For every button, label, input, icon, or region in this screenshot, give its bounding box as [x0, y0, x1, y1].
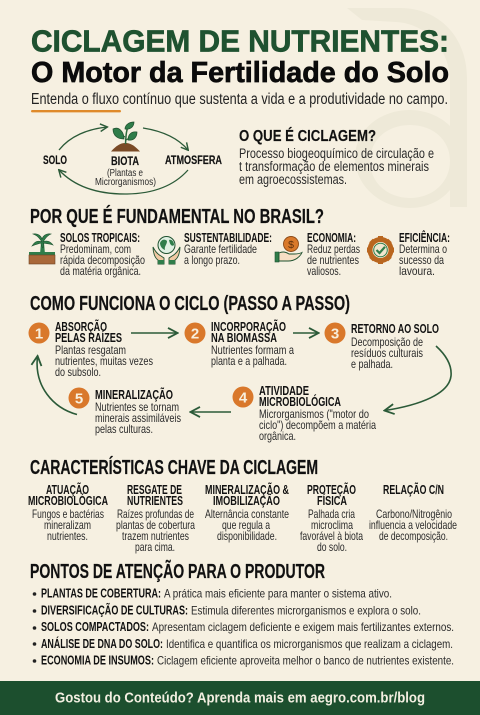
- attention list: A prática mais eficiente para manter o sistema ativo.: [164, 586, 392, 600]
- item: economia: de nutrientes: [307, 253, 359, 267]
- step 3: resíduos culturais: [351, 346, 423, 360]
- icon: sprout: [111, 122, 140, 152]
- heading: how it works: COMO FUNCIONA O CICLO (PASSO A PASSO): [30, 293, 350, 315]
- step 1: PELAS RAÍZES: [55, 330, 122, 345]
- item: economia: Reduz perdas: [307, 242, 360, 256]
- what is cycling: Processo biogeoquímico de circulação e: [239, 146, 434, 161]
- characteristic: mineralizacao: disponibilidade.: [217, 529, 277, 543]
- item: solos tropicais: [29, 231, 145, 278]
- heading: key characteristics: CARACTERÍSTICAS CHAVE DA CICLAGEM: [30, 456, 318, 479]
- characteristic: relacao: de decomposição.: [379, 529, 448, 543]
- what is cycling: em agroecossistemas.: [239, 172, 347, 187]
- step 1: do subsolo.: [55, 365, 101, 379]
- characteristic: protecao: FÍSICA: [317, 493, 347, 508]
- what is cycling: [239, 126, 434, 187]
- characteristic: protecao: do solo.: [317, 540, 347, 554]
- characteristic: resgate: para cima.: [135, 540, 175, 554]
- step 1: ABSORÇÃO: [55, 319, 107, 334]
- step 5: 5: [75, 390, 83, 408]
- attention list: ECONOMIA DE INSUMOS:: [41, 654, 154, 668]
- characteristic: resgate: trazem nutrientes: [122, 529, 189, 543]
- step 3: e palhada.: [351, 357, 393, 371]
- characteristic: mineralizacao: Alternância constante: [205, 507, 289, 521]
- characteristic: mineralizacao: MINERALIZAÇÃO &: [205, 482, 289, 497]
- characteristic: protecao: microclima: [311, 518, 353, 532]
- item: solos tropicais: SOLOS TROPICAIS:: [60, 231, 140, 245]
- characteristic: atuacao: ATUAÇÃO: [46, 482, 89, 497]
- watermark logo: [347, 8, 467, 208]
- item: eficiencia: sucesso da: [399, 253, 444, 267]
- characteristic: protecao: [300, 482, 363, 554]
- heading: why: POR QUE É FUNDAMENTAL NO BRASIL?: [30, 205, 324, 228]
- step 3: 3: [331, 326, 339, 342]
- title: O Motor da Fertilidade do Solo: [31, 57, 449, 89]
- characteristic: atuacao: nutrientes.: [47, 529, 88, 543]
- characteristic: relacao: Carbono/Nitrogênio: [376, 507, 452, 521]
- characteristic: resgate: [116, 483, 195, 554]
- arrow: step 5 to 1: [37, 356, 77, 414]
- arrow: step 4 to 5: [191, 411, 231, 413]
- step 1: 1: [35, 326, 43, 342]
- step 2: INCORPORAÇÃO: [211, 319, 286, 334]
- item: sustentabilidade: SUSTENTABILIDADE:: [184, 231, 272, 245]
- step 2: planta e a palhada.: [211, 354, 287, 368]
- step 4: ciclo") decompõem a matéria: [259, 418, 376, 432]
- what is cycling: O QUE É CICLAGEM?: [239, 126, 376, 145]
- characteristic: mineralizacao: [205, 482, 289, 543]
- item: solos tropicais: da matéria orgânica.: [60, 264, 141, 278]
- cycle diagram: BIOTA: [111, 154, 139, 168]
- step 2: 2: [191, 326, 199, 342]
- cycle diagram: (Plantas e: [107, 168, 143, 179]
- icon: gear with check: [367, 236, 394, 264]
- title: CICLAGEM DE NUTRIENTES:: [31, 24, 449, 58]
- item: solos tropicais: rápida decomposição: [60, 253, 145, 267]
- item: eficiencia: Determina o: [399, 242, 447, 256]
- arrow: step 1 to 2: [131, 332, 177, 334]
- step 4: orgânica.: [259, 429, 296, 443]
- item: eficiencia: lavoura.: [399, 264, 435, 278]
- step 5: Nutrientes se tornam: [95, 400, 179, 414]
- title: [31, 24, 449, 89]
- icon: globe in hands: [153, 236, 180, 264]
- attention list: DIVERSIFICAÇÃO DE CULTURAS:: [41, 602, 188, 618]
- cycle diagram: ATMOSFERA: [165, 153, 222, 167]
- step 4: MICROBIOLÓGICA: [259, 394, 341, 409]
- characteristic: resgate: plantas de cobertura: [116, 518, 195, 532]
- characteristic: protecao: PROTEÇÃO: [307, 482, 356, 497]
- step 1: nutrientes, muitas vezes: [55, 354, 153, 368]
- item: sustentabilidade: Garante fertilidade: [184, 242, 257, 256]
- step 4: 4: [239, 390, 248, 406]
- item: economia: [275, 231, 360, 278]
- attention list: Estimula diferentes microrganismos e explora o solo.: [191, 604, 421, 618]
- step 3: RETORNO AO SOLO: [351, 322, 439, 336]
- characteristic: atuacao: [28, 482, 108, 543]
- characteristic: resgate: Raízes profundas de: [117, 507, 194, 521]
- item: sustentabilidade: a longo prazo.: [184, 253, 240, 267]
- step 1: [28, 319, 153, 379]
- attention list: [33, 586, 454, 668]
- heading: attention points: PONTOS DE ATENÇÃO PARA O PRODUTOR: [30, 560, 325, 583]
- item: economia: ECONOMIA:: [307, 231, 356, 245]
- step 5: minerais assimiláveis: [95, 411, 181, 425]
- step 1: Plantas resgatam: [55, 343, 126, 357]
- step 4: [232, 384, 376, 443]
- step 4: ATIVIDADE: [259, 384, 309, 398]
- characteristic: atuacao: MICROBIOLÓGICA: [28, 493, 108, 508]
- attention list: ANÁLISE DE DNA DO SOLO:: [41, 636, 163, 651]
- item: solos tropicais: Predominam, com: [60, 242, 131, 256]
- characteristic: mineralizacao: que regula a: [222, 518, 270, 532]
- cycle diagram: Microrganismos): [95, 177, 156, 188]
- characteristic: relacao: [369, 482, 457, 543]
- step 3: Decomposição de: [351, 335, 423, 349]
- arrow: step 2 to 3: [293, 332, 318, 334]
- item: eficiencia: EFICIÊNCIA:: [399, 230, 450, 245]
- step 3: [324, 322, 439, 371]
- icon: hand with coin: $: [288, 239, 294, 251]
- cycle diagram: SOLO: [43, 153, 67, 167]
- characteristic: atuacao: Fungos e bactérias: [32, 507, 104, 521]
- cycle diagram: [43, 122, 222, 194]
- characteristic: resgate: RESGATE DE: [127, 483, 182, 497]
- footer: Gostou do Conteúdo? Aprenda mais em aegro.com.br/blog: [55, 690, 425, 706]
- footer: [0, 681, 480, 715]
- item: sustentabilidade: [153, 231, 272, 267]
- characteristic: protecao: favorável à biota: [300, 529, 363, 543]
- step 5: pelas culturas.: [95, 422, 153, 436]
- arrow: step 3 to 4: [385, 346, 451, 410]
- characteristic: protecao: Palhada cria: [308, 507, 355, 521]
- attention list: PLANTAS DE COBERTURA:: [41, 586, 161, 600]
- what is cycling: t transformação de elementos minerais: [239, 159, 429, 174]
- step 2: NA BIOMASSA: [211, 331, 277, 345]
- characteristic: mineralizacao: IMOBILIZAÇÃO: [213, 493, 280, 508]
- attention list: SOLOS COMPACTADOS:: [41, 620, 149, 634]
- step 5: [68, 387, 181, 436]
- characteristic: relacao: RELAÇÃO C/N: [383, 482, 444, 497]
- item: economia: valiosos.: [307, 264, 341, 278]
- step 5: MINERALIZAÇÃO: [95, 387, 173, 402]
- item: eficiencia: [367, 230, 450, 278]
- step 2: Nutrientes formam a: [211, 343, 294, 357]
- icon: palm and soil: [29, 234, 55, 264]
- characteristic: atuacao: mineralizam: [44, 518, 91, 532]
- step 4: Microrganismos ("motor do: [259, 407, 369, 421]
- step 2: [184, 319, 294, 368]
- characteristic: resgate: NUTRIENTES: [127, 494, 183, 508]
